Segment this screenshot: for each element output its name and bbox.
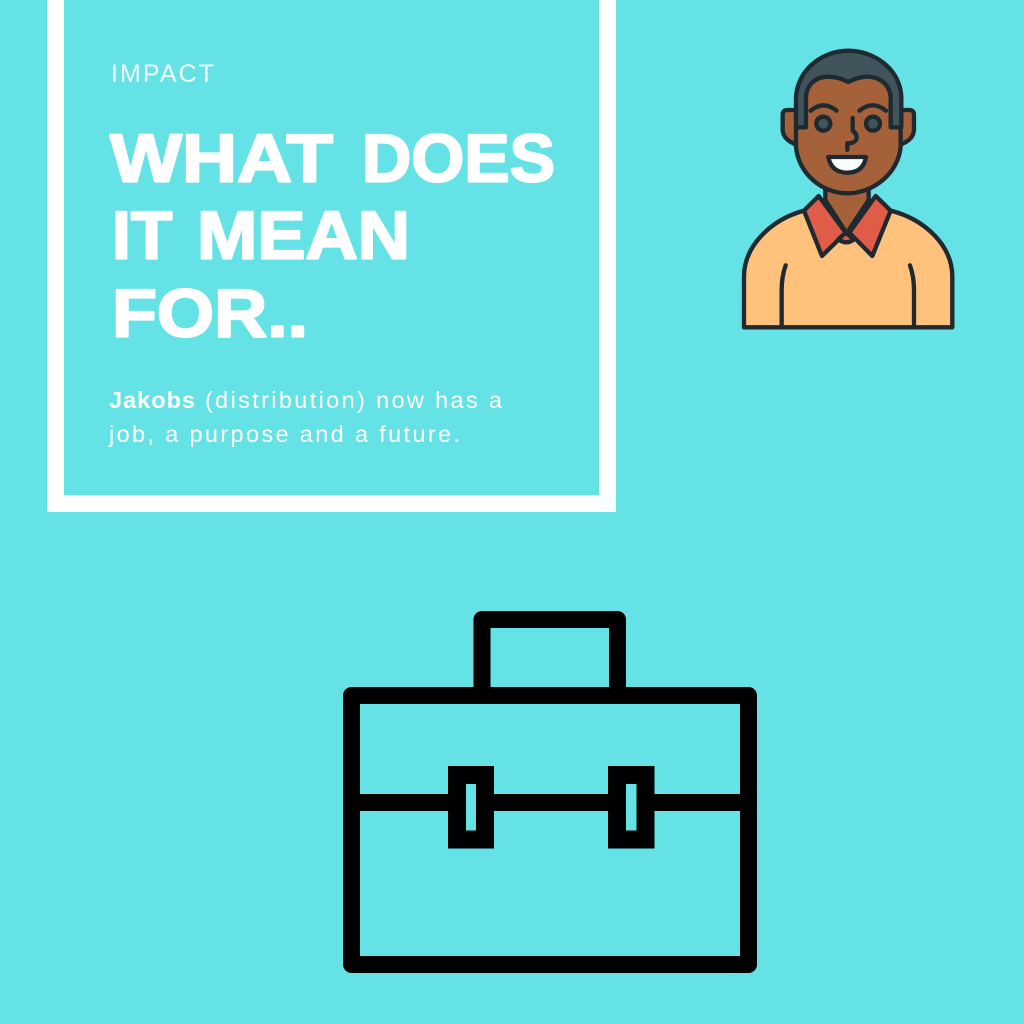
heading: what does it mean for: IT: [112, 199, 172, 274]
eyebrows: [811, 105, 886, 111]
collar: [804, 196, 891, 256]
neck: [825, 187, 869, 233]
icon: smiling man: [744, 51, 952, 327]
heading: what does it mean for: WHAT: [110, 121, 333, 197]
torso: [744, 211, 952, 327]
right clasp: [617, 775, 646, 840]
panel: white frame: [47, 0, 616, 512]
sleeve lines: [782, 265, 914, 327]
body text: Jakobs description: Jakobs: [109, 387, 195, 413]
strap: [352, 794, 748, 811]
face: [796, 63, 901, 193]
smile: [828, 157, 866, 173]
body text: Jakobs description: (distribution) now has a: [205, 387, 503, 413]
hair: [796, 51, 901, 127]
heading: what does it mean for: DOES: [362, 121, 555, 196]
left clasp: [457, 775, 485, 840]
icon: briefcase: [352, 620, 748, 964]
handle: [482, 620, 618, 695]
heading: what does it mean for: [110, 121, 555, 351]
eyes: [816, 117, 830, 131]
body text: Jakobs description: job, a purpose and a future.: [108, 421, 460, 447]
ears: [783, 110, 914, 145]
heading: what does it mean for: MEAN: [197, 198, 410, 273]
eyebrow label: IMPACT: IMPACT: [111, 60, 214, 88]
nose: [847, 118, 857, 150]
heading: what does it mean for: FOR..: [112, 275, 308, 351]
case body: [352, 696, 748, 964]
body text: Jakobs description: [108, 387, 503, 447]
